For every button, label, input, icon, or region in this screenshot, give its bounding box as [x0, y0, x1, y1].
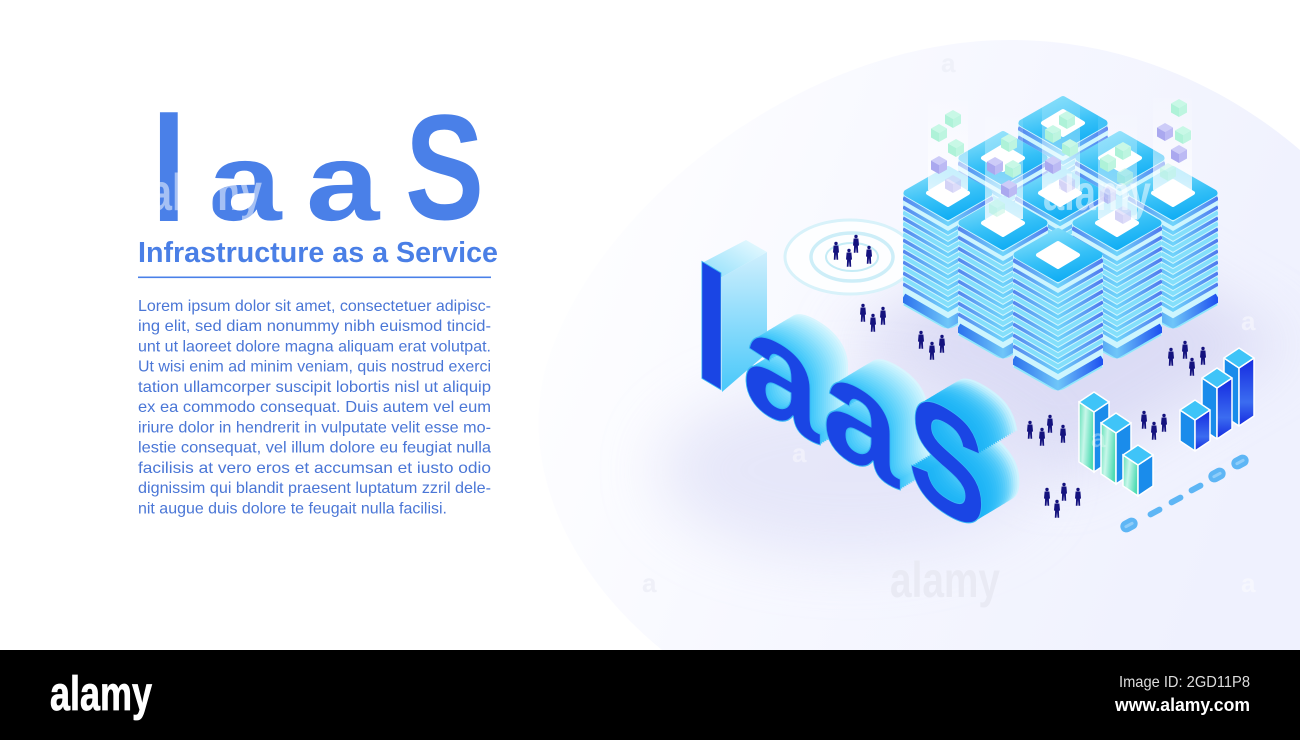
background swoosh panel	[539, 40, 1300, 650]
3D letter S: S	[908, 354, 986, 569]
3D letter a (first): a	[742, 268, 819, 476]
body paragraph	[138, 298, 491, 518]
signal rings with people	[785, 220, 915, 294]
footer bar	[0, 650, 1300, 740]
tower back right	[1074, 134, 1166, 298]
tower far left	[902, 170, 994, 333]
watermark marks: alamy	[150, 164, 262, 222]
headline IaaS	[152, 79, 484, 256]
headline IaaS: S	[405, 84, 484, 251]
footer logo: alamy	[50, 668, 152, 721]
body paragraph: Ut wisi enim ad minim veniam, quis nostrud exerci	[138, 358, 491, 376]
watermark marks: a	[1241, 568, 1256, 598]
floor shadow under letters	[660, 385, 1040, 555]
watermark marks: alamy	[890, 552, 1000, 608]
dashed data line	[1118, 452, 1251, 535]
data beams with cubes	[928, 98, 1192, 224]
watermark marks: alamy	[1043, 165, 1151, 221]
3D block side of letter I	[702, 240, 767, 392]
tower mid left	[957, 200, 1049, 363]
watermark marks: a	[1241, 306, 1256, 336]
subtitle rule	[138, 276, 491, 278]
watermark marks: a	[642, 568, 657, 598]
3D letter a (second): a	[822, 313, 899, 521]
body paragraph: iriure dolor in hendrerit in vulputate velit esse mo-	[138, 420, 491, 436]
tower back	[1017, 100, 1109, 263]
floor shadow under towers	[840, 210, 1290, 480]
people groups	[860, 304, 1206, 518]
body paragraph: ex ea commodo consequat. Duis autem vel eum	[138, 399, 491, 416]
footer url: www.alamy.com	[1114, 695, 1250, 715]
body paragraph: facilisis at vero eros et accumsan et iusto odio	[138, 460, 491, 477]
body paragraph: lestie consequat, vel illum dolore eu feugiat nulla	[138, 440, 491, 456]
bar chart: green bars	[1079, 392, 1153, 496]
headline IaaS: aa	[208, 120, 381, 244]
bar chart: blue bars	[1180, 348, 1254, 451]
watermark marks: a	[792, 438, 807, 468]
headline IaaS: I	[152, 79, 186, 256]
body paragraph: dignissim qui blandit praesent luptatum zzril dele-	[138, 480, 491, 497]
watermark marks	[150, 48, 1256, 608]
subtitle: Infrastructure as a Service	[138, 237, 498, 269]
tower far right	[1127, 170, 1219, 333]
watermark marks: a	[941, 48, 956, 78]
watermark marks: a	[1091, 423, 1106, 453]
tower mid right	[1071, 200, 1163, 363]
body paragraph: Lorem ipsum dolor sit amet, consectetuer adipisc-	[138, 298, 491, 315]
server towers block	[902, 100, 1219, 395]
3D letter I: I	[693, 220, 730, 432]
tower back left	[957, 134, 1049, 298]
body paragraph: nit augue duis dolore te feugait nulla facilisi.	[138, 500, 447, 518]
tower centre	[1014, 170, 1106, 333]
main illustration canvas	[138, 40, 1300, 650]
body paragraph: tation ullamcorper suscipit lobortis nisl ut aliquip	[138, 379, 491, 396]
body paragraph: ing elit, sed diam nonummy nibh euismod tincid-	[138, 318, 491, 335]
body paragraph: unt ut laoreet dolore magna aliquam erat volutpat.	[138, 338, 491, 356]
image id: Image ID: 2GD11P8	[1119, 674, 1250, 691]
tower front	[1012, 232, 1104, 395]
